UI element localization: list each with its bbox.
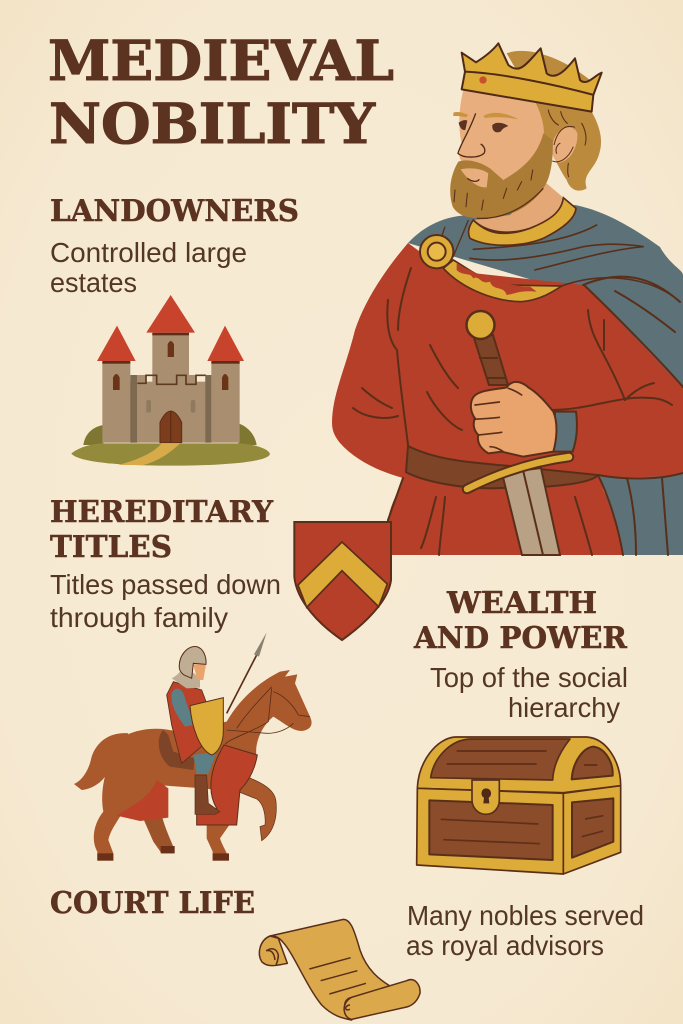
- king: neck: [473, 183, 563, 232]
- text: landowners description: [50, 237, 247, 298]
- knight: tunic: [167, 682, 207, 763]
- king: beard: [450, 133, 553, 218]
- knight: shield: [190, 698, 223, 755]
- icon: scroll: [259, 919, 420, 1020]
- king: face: [459, 90, 544, 180]
- king: brooch: [420, 235, 453, 268]
- king: crossguard: [467, 457, 569, 489]
- text: hereditary titles description: through family: [50, 602, 228, 633]
- knight: coif: [172, 665, 200, 688]
- king: sword pommel: [466, 311, 494, 339]
- scroll: bottom roll: [344, 980, 420, 1019]
- horse: body: [94, 670, 312, 861]
- horse: tack lines: [225, 687, 310, 744]
- horse: near fore leg: [207, 822, 232, 861]
- heading: hereditary titles: [50, 495, 274, 565]
- title: NOBILITY: [49, 91, 376, 156]
- horse: saddle: [159, 730, 195, 770]
- text: wealth and power description: [430, 662, 628, 723]
- icon: knight on horse: [74, 632, 312, 861]
- title: [48, 28, 394, 156]
- king: head: [420, 43, 680, 302]
- icon: treasure chest: [417, 737, 621, 874]
- scroll: sheet: [270, 919, 390, 1020]
- king: crown: [462, 43, 602, 112]
- heading: hereditary titles: TITLES: [50, 530, 172, 565]
- icon: heraldic shield: [294, 522, 391, 640]
- knight: leg: [193, 752, 217, 774]
- text: landowners description: Controlled large: [50, 237, 247, 268]
- heading: wealth and power: [413, 586, 628, 656]
- king: hair: [507, 51, 601, 191]
- king: hand: [471, 382, 577, 457]
- king: cape border: [443, 260, 562, 302]
- heading: hereditary titles: HEREDITARY: [50, 495, 274, 530]
- text: hereditary titles description: Titles passed down: [50, 569, 281, 600]
- king: cape: [408, 205, 683, 555]
- heading: court life: COURT LIFE: [50, 886, 255, 921]
- text: court life description: Many nobles served: [407, 900, 644, 931]
- king: ear: [552, 127, 577, 163]
- chest: plank lines: [441, 751, 603, 844]
- text: court life description: [406, 900, 644, 961]
- chest: lock: [472, 780, 499, 814]
- king: cape folds: [583, 277, 683, 555]
- icon: castle: [71, 295, 270, 466]
- horse: tail: [74, 733, 128, 790]
- horse: blanket: [117, 780, 168, 821]
- knight: boot: [195, 775, 220, 814]
- king: cuff: [553, 412, 577, 452]
- heading: wealth and power: WEALTH: [446, 586, 597, 621]
- chest: side: [563, 786, 621, 874]
- heading: landowners: LANDOWNERS: [50, 194, 299, 229]
- title: MEDIEVAL: [48, 28, 394, 93]
- knight: face: [193, 664, 206, 680]
- text: hereditary titles description: [50, 569, 281, 633]
- king: mouth: [461, 168, 488, 187]
- king: sword grip: [474, 335, 508, 385]
- king: belt: [406, 446, 598, 488]
- text: court life description: as royal advisors: [406, 930, 604, 961]
- knight: arm: [171, 689, 194, 727]
- king: facial lines: [458, 113, 485, 157]
- chest: lid: [417, 737, 621, 793]
- text: wealth and power description: Top of the social: [430, 662, 628, 693]
- heading: wealth and power: AND POWER: [413, 621, 628, 656]
- king: tunic folds: [353, 268, 683, 555]
- chest: front: [417, 788, 563, 874]
- king: sword blade: [502, 468, 560, 555]
- king: tunic: [332, 243, 683, 555]
- text: wealth and power description: hierarchy: [508, 692, 620, 723]
- king: collar: [469, 198, 576, 245]
- text: landowners description: estates: [50, 267, 137, 298]
- knight: helmet: [179, 646, 206, 678]
- scroll: top roll: [259, 936, 287, 966]
- scroll: writing lines: [309, 958, 366, 994]
- horse: far legs: [142, 815, 174, 853]
- illustration: king: [332, 43, 683, 555]
- knight: spear: [227, 655, 257, 713]
